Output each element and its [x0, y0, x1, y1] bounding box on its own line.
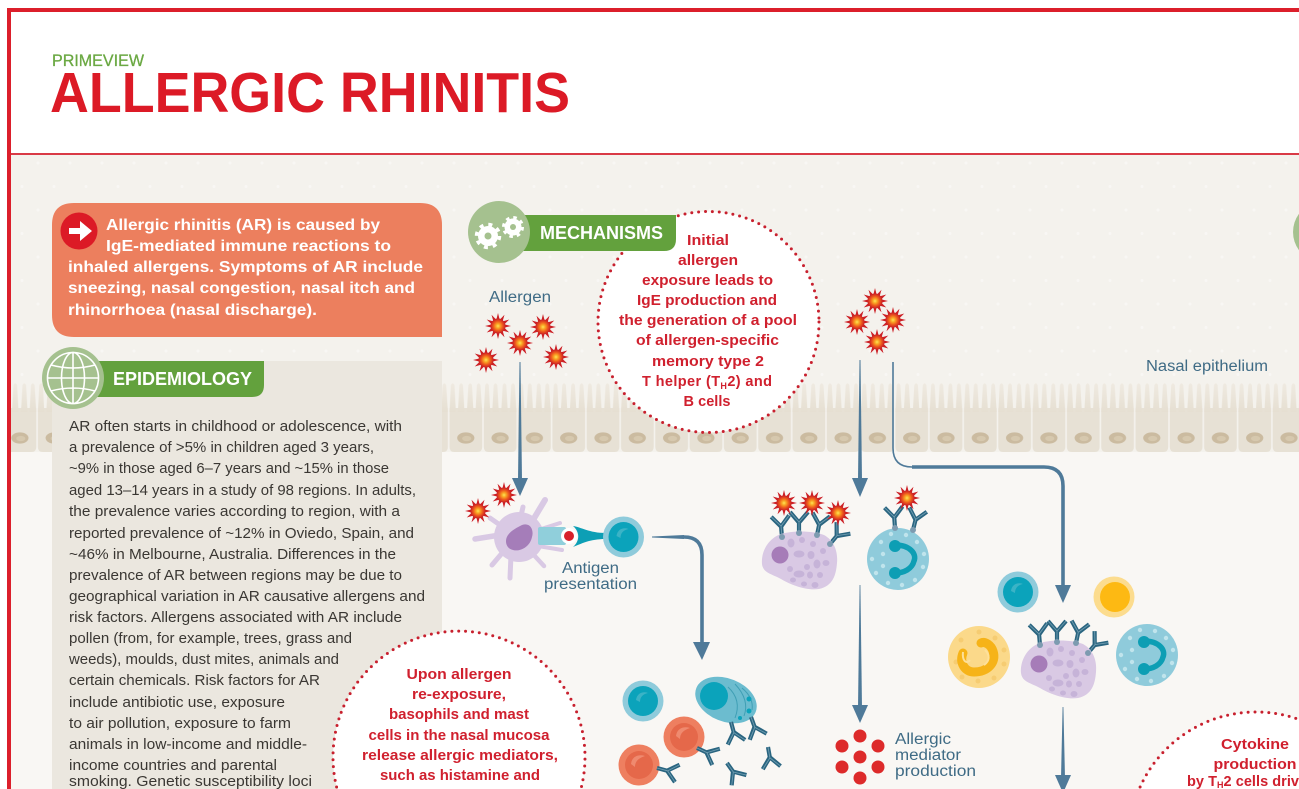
epidemiology text: include antibiotic use, exposure	[69, 694, 285, 711]
callout: initial allergen exposure: memory type 2	[652, 354, 764, 370]
epidemiology text: AR often starts in childhood or adolescence, with	[69, 418, 402, 435]
arrow: antigen presentation to B cell activation	[652, 535, 710, 660]
label: antigen presentation: presentation	[544, 576, 637, 593]
epidemiology text: aged 13–14 years in a study of 98 regions. In adults,	[69, 482, 416, 499]
B cells, plasma cell and antibodies	[618, 668, 781, 786]
callout: initial allergen exposure: Initial	[687, 233, 729, 249]
epidemiology text: geographical variation in AR causative allergens and	[69, 588, 425, 605]
arrow: allergen to dendritic cell	[512, 362, 528, 496]
heading circle at right edge	[1293, 214, 1299, 250]
yellow cell	[1094, 576, 1134, 618]
epidemiology text: ~46% in Melbourne, Australia. Differences in the	[69, 546, 396, 563]
callout: initial allergen exposure: H	[720, 381, 727, 391]
panel: introduction: inhaled allergens. Symptoms of AR include	[68, 259, 423, 276]
mast cell with IgE	[1021, 621, 1108, 698]
callout: allergen re-exposure: basophils and mast	[389, 707, 529, 723]
plasma cell	[688, 668, 764, 732]
label: allergic mediator production: mediator	[895, 747, 961, 764]
callout: initial allergen exposure: IgE production and	[637, 293, 777, 309]
callout: initial allergen exposure	[598, 212, 819, 432]
panel: introduction: sneezing, nasal congestion, nasal itch and	[68, 280, 415, 297]
epidemiology text: animals in low-income and middle-	[69, 736, 307, 753]
effector cell cluster	[948, 572, 1178, 698]
arrow: cells to allergic mediator production	[852, 585, 868, 723]
eosinophil	[948, 626, 1010, 688]
epidemiology text	[68, 418, 425, 789]
epidemiology text: a prevalence of >5% in children aged 3 years,	[69, 439, 374, 456]
mast cell with allergen-bound IgE	[762, 490, 851, 589]
epidemiology text: reported prevalence of ~12% in Oviedo, Spain, and	[69, 525, 414, 542]
callout: allergen re-exposure: re-exposure,	[412, 687, 506, 703]
panel: introduction: rhinorrhoea (nasal discharge).	[68, 302, 317, 319]
callout: initial allergen exposure: T helper (T	[642, 374, 720, 390]
callout: initial allergen exposure: of allergen-specific	[636, 333, 779, 349]
callout: initial allergen exposure: allergen	[678, 253, 738, 269]
panel: introduction: Allergic rhinitis (AR) is caused by	[106, 217, 380, 234]
epidemiology heading: EPIDEMIOLOGY	[113, 369, 252, 389]
epidemiology text: risk factors. Allergens associated with AR include	[69, 609, 402, 626]
callout: initial allergen exposure: the generation of a pool	[619, 313, 797, 329]
title block: ALLERGIC RHINITIS	[50, 61, 570, 124]
callout: initial allergen exposure: B cells	[684, 394, 730, 410]
epidemiology text: the prevalence varies according to region, with a	[69, 503, 401, 520]
callout: cytokine production	[1140, 712, 1299, 789]
epidemiology text: weeds), moulds, dust mites, animals and	[68, 651, 339, 668]
icon: gears	[476, 218, 522, 248]
nasal epithelium cell layer	[11, 380, 1299, 454]
epidemiology text: income countries and parental	[69, 757, 277, 774]
callout: allergen re-exposure: release allergic mediators,	[362, 748, 558, 764]
callout: cytokine production: Cytokine	[1221, 737, 1289, 753]
callout: allergen re-exposure: cells in the nasal mucosa	[368, 728, 550, 744]
label: allergic mediator production	[895, 731, 976, 780]
epidemiology text: ~9% in those aged 6–7 years and ~15% in those	[69, 460, 389, 477]
callout: allergen re-exposure: such as histamine and	[380, 768, 540, 784]
panel: introduction	[52, 203, 442, 337]
label: allergic mediator production: production	[895, 763, 976, 780]
label: allergic mediator production: Allergic	[895, 731, 951, 748]
epidemiology text: to air pollution, exposure to farm	[69, 715, 291, 732]
label: antigen presentation: Antigen	[562, 560, 619, 577]
callout: cytokine production: production	[1214, 757, 1296, 773]
title block: PRIMEVIEW	[52, 51, 144, 70]
callout: initial allergen exposure: exposure leads to	[642, 273, 773, 289]
label: allergen: Allergen	[489, 289, 551, 306]
heading: mechanisms: MECHANISMS	[540, 223, 663, 243]
panel: epidemiology	[42, 347, 442, 789]
callout: initial allergen exposure: 2) and	[727, 374, 772, 390]
label: nasal epithelium: Nasal epithelium	[1146, 358, 1268, 375]
heading: mechanisms	[468, 201, 676, 263]
label: antigen presentation	[544, 560, 637, 593]
basophil with allergen-bound IgE	[867, 485, 929, 590]
epidemiology text: certain chemicals. Risk factors for AR	[69, 672, 320, 689]
epidemiology text: prevalence of AR between regions may be due to	[69, 567, 402, 584]
arrow: epithelium to effector cells	[893, 362, 1071, 603]
arrow: effector cells to cytokines	[1055, 707, 1071, 789]
dendritic cell presenting antigen to T cell	[465, 482, 644, 578]
allergens: re-exposure	[844, 288, 906, 355]
arrow: re-exposure to mast cell and basophil	[852, 360, 868, 497]
epidemiology heading	[42, 347, 264, 409]
allergens: initial exposure	[473, 313, 569, 373]
allergic mediators	[836, 730, 884, 784]
callout: allergen re-exposure: Upon allergen	[406, 667, 512, 683]
callout: allergen re-exposure	[333, 631, 585, 789]
epidemiology text: pollen (from, for example, trees, grass and	[69, 630, 352, 647]
panel: introduction: IgE-mediated immune reactions to	[106, 238, 391, 255]
